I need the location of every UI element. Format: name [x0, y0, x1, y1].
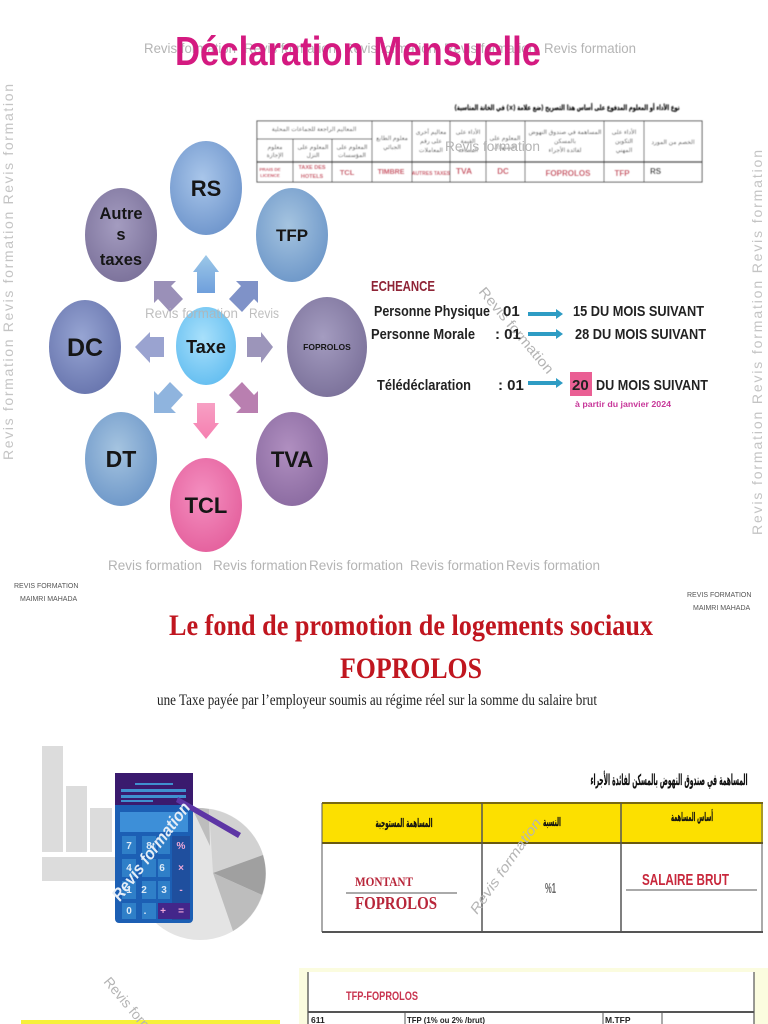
calculator: +	[160, 906, 166, 917]
node: TVA: TVA	[271, 447, 313, 472]
deadlines: echeance: : 01	[495, 326, 521, 343]
watermarks: top and side: Revis formation	[144, 40, 236, 56]
table: declaration types: TFP	[614, 169, 630, 178]
table: declaration types: المعاليم الراجعة للجماعات المحلية	[272, 126, 357, 133]
deadlines: echeance	[371, 278, 708, 409]
diagram: taxes around central circle	[49, 141, 367, 552]
table: declaration types: RS	[650, 167, 662, 176]
watermark: over diagram: Revis	[249, 305, 279, 321]
table: TFP-FOPROLOS	[299, 968, 768, 1024]
table: declaration types: معاليم أخرى	[416, 127, 446, 136]
table: declaration types: المؤسسات	[338, 152, 366, 159]
table: declaration types: المعلوم على	[298, 144, 329, 151]
table: declaration types: DC	[497, 167, 509, 176]
deadlines: echeance: : 01	[498, 377, 524, 394]
table: declaration types: القيمة	[460, 138, 476, 145]
calculator: ×	[178, 863, 184, 874]
watermarks: top and side: Revis formation	[410, 557, 504, 573]
node: Autres taxes: s	[116, 226, 126, 244]
node: center Taxe	[176, 307, 236, 385]
watermarks: top and side: Revis formation Revis formation Revis formation	[0, 84, 16, 460]
table: declaration types: النزل	[307, 152, 320, 159]
highlight: 20	[570, 372, 592, 396]
watermarks: top and side: Revis formation	[213, 557, 307, 573]
node: center Taxe: Taxe	[186, 337, 226, 357]
calculator: 3	[161, 885, 167, 896]
author credit left: MAIMRI MAHADA	[20, 596, 78, 603]
table: FOPROLOS calculation: %1	[545, 880, 556, 897]
table: declaration types	[257, 103, 702, 182]
heading: FOPROLOS: Le fond de promotion de logements sociaux	[169, 609, 653, 642]
deadlines: echeance: à partir du janvier 2024	[575, 399, 671, 409]
table: FOPROLOS calculation: المساهمة المستوجبة	[376, 816, 432, 831]
watermarks: top and side: Revis formation	[244, 40, 336, 56]
table: declaration types: الأداء على	[612, 127, 637, 136]
table: FOPROLOS calculation: أساس المساهمة	[671, 809, 713, 824]
author credit right: REVIS FORMATION	[687, 592, 751, 599]
calculator	[108, 773, 241, 923]
title: Déclaration Mensuelle	[175, 28, 541, 74]
watermarks: top and side	[0, 40, 765, 573]
table: declaration types: TCL	[340, 168, 355, 177]
deadlines: echeance: ECHEANCE	[371, 278, 435, 295]
table: declaration types: على رقم	[420, 138, 442, 145]
illustration: calculator and charts	[42, 746, 266, 940]
table: declaration types: المضافة	[458, 147, 478, 154]
table: FOPROLOS calculation: FOPROLOS	[355, 893, 437, 913]
heading: FOPROLOS	[169, 609, 653, 685]
deadlines: echeance: 01	[503, 303, 520, 320]
table: declaration types: نوع الأداء أو المعلوم المدفوع على أساس هذا التصريح (ضع علامة (×) في الخانة المناسبة)	[454, 103, 680, 112]
table: declaration types: التكوين	[615, 138, 633, 145]
table: declaration types: HOTELS	[301, 174, 323, 180]
table: declaration types: الأداء على	[456, 127, 481, 136]
table: declaration types: الخصم من المورد	[651, 139, 695, 146]
calculator: -	[179, 885, 183, 896]
node: DC: DC	[67, 334, 103, 362]
calculator: 6	[159, 863, 165, 874]
node: TFP	[256, 188, 328, 282]
table: declaration types: بالمسكن	[554, 138, 576, 145]
table: FOPROLOS calculation	[322, 803, 763, 932]
table: declaration types: لفائدة الأجراء	[549, 145, 582, 154]
table: declaration types: الجبائي	[383, 144, 401, 151]
table: declaration types: TAXE DES	[298, 165, 326, 171]
node: TCL: TCL	[185, 493, 227, 518]
calculator: =	[178, 906, 184, 917]
node: RS: RS	[191, 176, 221, 201]
calculator: 4	[126, 863, 132, 874]
table: FOPROLOS calculation: MONTANT	[355, 874, 413, 889]
watermarks: top and side: Revis formation	[444, 40, 536, 56]
table: FOPROLOS calculation: SALAIRE BRUT	[642, 872, 729, 889]
watermarks: top and side: Revis formation	[506, 557, 600, 573]
yellow highlighted strip	[21, 1020, 280, 1024]
table: declaration types: PRAIS DE	[259, 167, 281, 172]
calculator: 7	[126, 841, 132, 852]
watermarks: top and side: Revis formation	[344, 40, 436, 56]
table: declaration types: AUTRES TAXES	[412, 171, 451, 177]
table: declaration types: معلوم	[268, 144, 282, 151]
node: Autres taxes: Autre	[99, 205, 143, 223]
deadlines: echeance: DU MOIS SUIVANT	[596, 377, 708, 394]
deadlines: echeance: Télédéclaration	[377, 377, 471, 394]
arrows around center	[135, 255, 273, 439]
calculator: 8	[146, 841, 152, 852]
calculator: .	[144, 906, 147, 917]
table: declaration types: المهني	[616, 147, 633, 154]
node: DC	[49, 300, 121, 394]
node: RS	[170, 141, 242, 235]
node: DT	[85, 412, 157, 506]
watermark: over diagram: Revis formation	[145, 305, 238, 321]
node: TVA	[256, 412, 328, 506]
table: declaration types: الإجازة	[267, 152, 284, 159]
watermarks: top and side: Revis formation	[309, 557, 403, 573]
bar chart	[42, 746, 122, 881]
watermarks: top and side: Revis formation Revis formation Revis formation	[749, 150, 765, 535]
table: declaration types: المساهمة في صندوق النهوض	[529, 129, 602, 136]
deadlines: echeance: Personne Morale	[371, 326, 475, 343]
node: FOPROLOS: FOPROLOS	[303, 342, 351, 352]
node: Autres taxes: taxes	[100, 251, 142, 269]
deadlines: echeance: 28 DU MOIS SUIVANT	[575, 326, 706, 343]
calculator: 1	[126, 885, 132, 896]
heading: FOPROLOS: FOPROLOS	[340, 652, 482, 685]
table: FOPROLOS calculation: Revis formation	[466, 815, 544, 917]
deadlines: echeance: 20	[572, 377, 589, 394]
author credit right: MAIMRI MAHADA	[693, 605, 750, 612]
pen	[176, 797, 241, 838]
table: declaration types: الاستهلاك	[493, 144, 517, 151]
calculator: 2	[141, 885, 147, 896]
subtitle: une Taxe payée par l’employeur soumis au régime réel sur la somme du salaire brut	[157, 692, 597, 709]
watermarks: top and side: Revis formation	[108, 557, 202, 573]
table: declaration types: TVA	[456, 166, 472, 176]
table: declaration types: TIMBRE	[378, 169, 405, 176]
node: TFP: TFP	[276, 226, 308, 245]
calculator: %	[177, 841, 186, 852]
author credit right	[687, 592, 751, 612]
calculator: Revis formation	[108, 799, 194, 904]
table: declaration types: المعلوم على	[337, 144, 368, 151]
author credit left	[14, 583, 78, 603]
node: TCL	[170, 458, 242, 552]
watermark: over table: Revis formation	[445, 138, 540, 154]
node: Autres taxes	[85, 188, 157, 282]
table: declaration types: FOPROLOS	[546, 169, 591, 178]
table: declaration types: المعلوم على	[490, 135, 521, 142]
table: declaration types: LICENCE	[260, 173, 280, 178]
deadlines: echeance: 15 DU MOIS SUIVANT	[573, 303, 704, 320]
watermarks: top and side: Revis formation	[476, 284, 557, 377]
arrows: deadlines	[528, 309, 563, 388]
node: FOPROLOS	[287, 297, 367, 397]
author credit left: REVIS FORMATION	[14, 583, 78, 590]
table: TFP-FOPROLOS: TFP-FOPROLOS	[346, 989, 418, 1003]
table: FOPROLOS calculation: النسبة	[543, 815, 561, 829]
watermarks: top and side: Revis formation	[544, 40, 636, 56]
deadlines: echeance: Personne Physique	[374, 303, 490, 320]
table: declaration types: معلوم الطابع	[376, 135, 408, 142]
table: declaration types: المعاملات	[419, 147, 443, 154]
calculator: 0	[126, 906, 132, 917]
pie chart	[134, 808, 266, 940]
node: DT: DT	[106, 446, 136, 472]
